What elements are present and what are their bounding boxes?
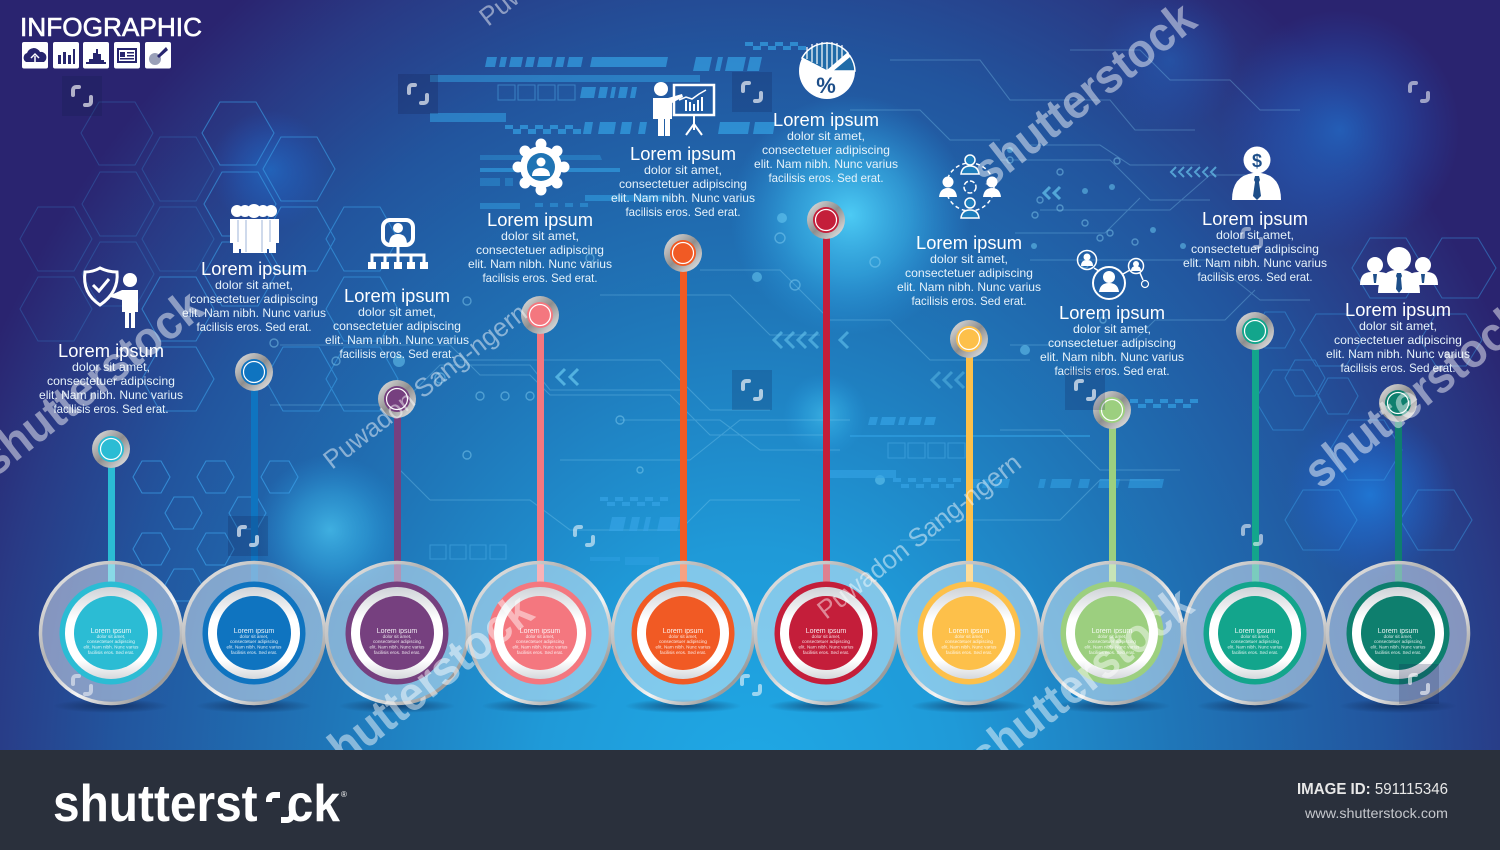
text block: facilisis eros. Sed erat. <box>1054 364 1170 378</box>
connector <box>537 315 544 591</box>
icon: people network <box>1078 250 1148 299</box>
text block: consectetuer adipiscing <box>476 243 604 257</box>
base ring label: elit. Nam nibh. Nunc varius <box>1371 644 1426 650</box>
timeline item 9 <box>1183 146 1327 713</box>
base ring label: elit. Nam nibh. Nunc varius <box>656 644 711 650</box>
base ring label: Lorem ipsum <box>91 628 131 635</box>
base ring label: facilisis eros. Sed erat. <box>1089 650 1135 655</box>
text block: elit. Nam nibh. Nunc varius <box>468 257 612 271</box>
text block: Lorem ipsum <box>58 340 164 361</box>
base ring label: facilisis eros. Sed erat. <box>1232 650 1278 655</box>
icon: percentage pie chart: % <box>816 73 836 98</box>
text block: dolor sit amet, <box>501 229 579 243</box>
watermark text: Puwadon Sang-ngern <box>317 297 533 475</box>
base ring <box>184 562 324 713</box>
base ring label: consectetuer adipiscing <box>230 639 278 644</box>
text block: consectetuer adipiscing <box>47 374 175 388</box>
base ring <box>40 562 182 713</box>
base ring label: dolor sit amet, <box>812 634 840 639</box>
base ring label: elit. Nam nibh. Nunc varius <box>370 644 425 650</box>
base ring <box>1042 562 1182 713</box>
text block <box>182 258 326 334</box>
base ring label: elit. Nam nibh. Nunc varius <box>799 644 854 650</box>
connector <box>394 399 401 591</box>
watermark marks <box>62 72 1439 704</box>
base ring label: consectetuer adipiscing <box>373 639 421 644</box>
text block: elit. Nam nibh. Nunc varius <box>1183 256 1327 270</box>
text block: consectetuer adipiscing <box>1048 336 1176 350</box>
text block: consectetuer adipiscing <box>905 266 1033 280</box>
timeline item 4 <box>468 138 612 713</box>
watermark text: shutterstock <box>299 584 543 791</box>
base ring label: Lorem ipsum <box>663 628 703 635</box>
icon: people in a cycle <box>939 155 1001 218</box>
base ring <box>612 562 754 713</box>
base ring <box>1328 562 1468 713</box>
text block <box>1040 302 1184 378</box>
node <box>664 234 702 272</box>
text block: Lorem ipsum <box>344 285 450 306</box>
text block: elit. Nam nibh. Nunc varius <box>754 157 898 171</box>
text block: facilisis eros. Sed erat. <box>340 347 454 361</box>
text block: facilisis eros. Sed erat. <box>768 171 884 185</box>
image id: IMAGE ID: 591115346 <box>1297 781 1448 798</box>
timeline item 3 <box>325 220 469 713</box>
base ring label: consectetuer adipiscing <box>1231 639 1279 644</box>
base ring <box>756 562 896 713</box>
base ring label: Lorem ipsum <box>806 628 846 635</box>
text block: facilisis eros. Sed erat. <box>1198 270 1312 284</box>
base ring label: Lorem ipsum <box>234 628 274 635</box>
text block: dolor sit amet, <box>1216 228 1294 242</box>
base ring label: dolor sit amet, <box>1098 634 1126 639</box>
base ring <box>470 562 610 713</box>
base ring label <box>656 628 711 655</box>
base ring label: Lorem ipsum <box>1092 628 1132 635</box>
base ring label: facilisis eros. Sed erat. <box>374 650 420 655</box>
text block: Lorem ipsum <box>1202 208 1308 229</box>
text block: consectetuer adipiscing <box>190 292 318 306</box>
connector <box>1395 403 1402 591</box>
text block: Lorem ipsum <box>916 232 1022 253</box>
base ring label: dolor sit amet, <box>669 634 697 639</box>
text block: elit. Nam nibh. Nunc varius <box>39 388 183 402</box>
connector <box>1252 331 1259 591</box>
tile: ID card <box>114 42 140 68</box>
tile: tools <box>145 42 171 68</box>
base ring label: facilisis eros. Sed erat. <box>660 650 706 655</box>
header: INFOGRAPHIC title: INFOGRAPHIC <box>20 12 202 42</box>
connector <box>1109 410 1116 591</box>
background glows <box>210 0 1460 605</box>
base ring label: facilisis eros. Sed erat. <box>88 650 134 655</box>
tile: cloud upload <box>22 42 48 68</box>
text block: facilisis eros. Sed erat. <box>626 205 740 219</box>
base ring label <box>84 628 139 655</box>
base ring label: consectetuer adipiscing <box>945 639 993 644</box>
icon: business person with dollar <box>1232 146 1281 200</box>
connector <box>251 372 258 591</box>
base ring label: dolor sit amet, <box>955 634 983 639</box>
base ring <box>1184 562 1326 713</box>
base ring label <box>1228 628 1283 655</box>
icon: monitor and org chart <box>368 220 428 269</box>
timeline item 10 <box>1326 247 1470 713</box>
text block <box>1326 299 1470 375</box>
base ring label <box>1371 628 1426 655</box>
base ring label: dolor sit amet, <box>240 634 268 639</box>
base ring label: dolor sit amet, <box>383 634 411 639</box>
base ring label: Lorem ipsum <box>949 628 989 635</box>
icon: gear with person <box>512 138 570 196</box>
base ring label <box>942 628 997 655</box>
text block <box>611 143 755 219</box>
text block: dolor sit amet, <box>644 163 722 177</box>
connector <box>108 449 115 591</box>
text block: elit. Nam nibh. Nunc varius <box>325 333 469 347</box>
base ring label: elit. Nam nibh. Nunc varius <box>513 644 568 650</box>
watermark text: Puwadon Sang-ngern <box>811 447 1027 625</box>
timeline item 1 <box>39 268 183 713</box>
base ring label: consectetuer adipiscing <box>516 639 564 644</box>
base ring label: consectetuer adipiscing <box>1374 639 1422 644</box>
base ring label: consectetuer adipiscing <box>659 639 707 644</box>
text block: facilisis eros. Sed erat. <box>912 294 1026 308</box>
text block: facilisis eros. Sed erat. <box>1340 361 1456 375</box>
base ring label: dolor sit amet, <box>1241 634 1269 639</box>
text block: dolor sit amet, <box>215 278 293 292</box>
timeline item 6 <box>754 42 898 713</box>
site url: www.shutterstock.com <box>1304 805 1448 821</box>
base ring label <box>227 628 282 655</box>
base ring label: elit. Nam nibh. Nunc varius <box>227 644 282 650</box>
tile: growth chart <box>53 42 79 68</box>
text block: Lorem ipsum <box>487 209 593 230</box>
text block <box>468 209 612 285</box>
node <box>950 320 988 358</box>
text block: Lorem ipsum <box>630 143 736 164</box>
base ring label: elit. Nam nibh. Nunc varius <box>84 644 139 650</box>
base ring label: facilisis eros. Sed erat. <box>231 650 277 655</box>
base ring label <box>799 628 854 655</box>
text block: dolor sit amet, <box>930 252 1008 266</box>
text block: consectetuer adipiscing <box>333 319 461 333</box>
base ring label: elit. Nam nibh. Nunc varius <box>1228 644 1283 650</box>
node <box>92 430 130 468</box>
base ring label: Lorem ipsum <box>377 628 417 635</box>
base ring label: dolor sit amet, <box>97 634 125 639</box>
base ring label: elit. Nam nibh. Nunc varius <box>1085 644 1140 650</box>
base ring label <box>513 628 568 655</box>
base ring label: consectetuer adipiscing <box>1088 639 1136 644</box>
base ring label: consectetuer adipiscing <box>87 639 135 644</box>
footer bar <box>0 750 1500 850</box>
base ring label: dolor sit amet, <box>526 634 554 639</box>
base ring label: Lorem ipsum <box>1378 628 1418 635</box>
base ring <box>898 562 1040 713</box>
text block <box>897 232 1041 308</box>
text block <box>325 285 469 361</box>
icon: business team <box>1360 247 1438 293</box>
base ring label: elit. Nam nibh. Nunc varius <box>942 644 997 650</box>
connector <box>966 339 973 591</box>
text block: elit. Nam nibh. Nunc varius <box>611 191 755 205</box>
text block: facilisis eros. Sed erat. <box>196 320 312 334</box>
text block: Lorem ipsum <box>773 109 879 130</box>
base ring <box>326 562 468 713</box>
text block: elit. Nam nibh. Nunc varius <box>182 306 326 320</box>
text block: dolor sit amet, <box>787 129 865 143</box>
base ring label: facilisis eros. Sed erat. <box>517 650 563 655</box>
text block: consectetuer adipiscing <box>1191 242 1319 256</box>
text block: facilisis eros. Sed erat. <box>482 271 598 285</box>
text block <box>39 340 183 416</box>
node <box>521 296 559 334</box>
base ring label: facilisis eros. Sed erat. <box>946 650 992 655</box>
footer logo: ® <box>341 790 347 799</box>
text block: dolor sit amet, <box>1359 319 1437 333</box>
icon: business person with dollar: $ <box>1252 151 1262 171</box>
icon: presenter with chart board <box>653 82 714 136</box>
hexagon pattern <box>20 102 1496 601</box>
text block: facilisis eros. Sed erat. <box>54 402 168 416</box>
base ring label: facilisis eros. Sed erat. <box>1375 650 1421 655</box>
timeline item 7 <box>897 155 1041 713</box>
timeline item 8 <box>1040 250 1184 713</box>
text block: elit. Nam nibh. Nunc varius <box>1040 350 1184 364</box>
icon: percentage pie chart <box>799 42 855 99</box>
watermark text: shutterstock <box>959 577 1203 784</box>
text block: consectetuer adipiscing <box>1334 333 1462 347</box>
text block: dolor sit amet, <box>1073 322 1151 336</box>
timeline item 2 <box>182 204 326 713</box>
base ring label: consectetuer adipiscing <box>802 639 850 644</box>
text block: Lorem ipsum <box>201 258 307 279</box>
node <box>1093 391 1131 429</box>
base ring label <box>370 628 425 655</box>
base ring label: dolor sit amet, <box>1384 634 1412 639</box>
text block: dolor sit amet, <box>72 360 150 374</box>
node <box>235 353 273 391</box>
text block <box>1183 208 1327 284</box>
text block: consectetuer adipiscing <box>762 143 890 157</box>
text block <box>754 109 898 185</box>
connector <box>680 253 687 591</box>
text block: dolor sit amet, <box>358 305 436 319</box>
circuit lines <box>270 50 1310 540</box>
tech stripes <box>430 42 1198 565</box>
connector <box>823 220 830 591</box>
chevron arrows <box>557 167 1216 388</box>
node <box>378 380 416 418</box>
base ring label <box>1085 628 1140 655</box>
base ring label: facilisis eros. Sed erat. <box>803 650 849 655</box>
header icon tiles <box>22 42 171 68</box>
text block: elit. Nam nibh. Nunc varius <box>897 280 1041 294</box>
node <box>1379 384 1417 422</box>
tile: bar skyline <box>83 42 109 68</box>
node <box>1236 312 1274 350</box>
text block: elit. Nam nibh. Nunc varius <box>1326 347 1470 361</box>
footer logo: shutterstock <box>53 775 340 833</box>
text block: Lorem ipsum <box>1345 299 1451 320</box>
text block: Lorem ipsum <box>1059 302 1165 323</box>
icon: crowd of people <box>230 204 279 253</box>
timeline item 5 <box>611 82 755 713</box>
base ring label: Lorem ipsum <box>1235 628 1275 635</box>
node <box>807 201 845 239</box>
icon: shield and presenter <box>85 268 138 328</box>
text block: consectetuer adipiscing <box>619 177 747 191</box>
base ring label: Lorem ipsum <box>520 628 560 635</box>
